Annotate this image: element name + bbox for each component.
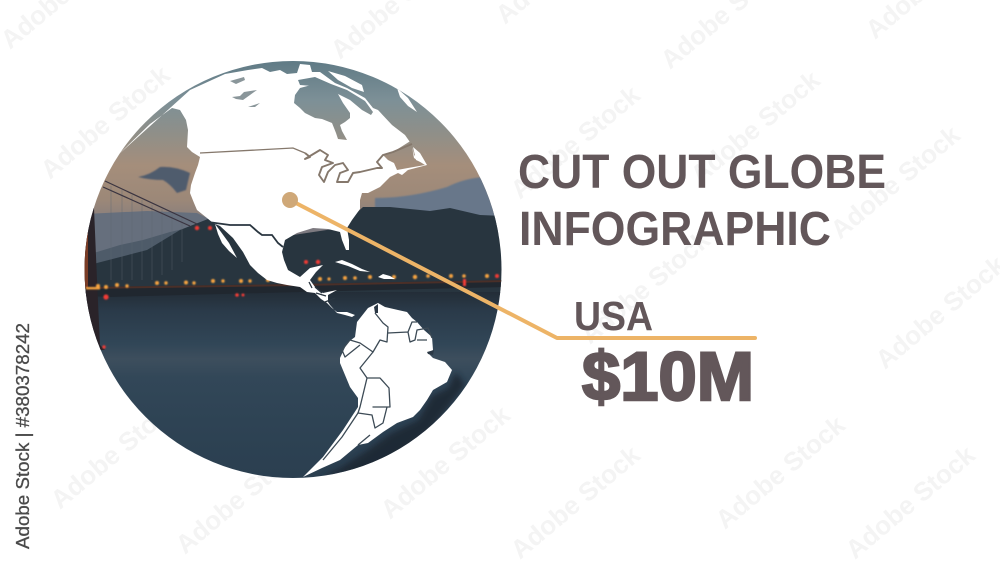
sea xyxy=(80,292,510,487)
Amazon mouth xyxy=(427,350,434,355)
bridge tower xyxy=(84,208,105,350)
bridge suspenders xyxy=(111,186,182,280)
bridge cables xyxy=(103,181,197,226)
bridge deck xyxy=(85,280,505,297)
label: USA: USA xyxy=(574,293,653,339)
globe xyxy=(80,55,510,487)
cloud: right bank xyxy=(375,177,505,225)
marker dot xyxy=(282,192,298,208)
title: INFOGRAPHIC xyxy=(519,203,831,256)
watermark: Adobe Stock xyxy=(35,59,176,185)
stock credit: Adobe Stock | #380378242 xyxy=(13,323,33,549)
South America borders xyxy=(323,313,432,460)
value: $10M: $10M xyxy=(582,338,754,415)
watermark: Adobe Stock xyxy=(840,439,981,563)
watermark: Adobe Stock xyxy=(575,224,716,350)
watermark: Adobe Stock xyxy=(685,64,826,190)
watermark: Adobe Stock xyxy=(505,439,646,563)
Atlantic Canada cut-out xyxy=(383,140,425,170)
Lake Maracaibo xyxy=(374,304,378,313)
border: USA and Canada 49th parallel xyxy=(200,148,305,153)
globe photo: sky xyxy=(80,55,510,235)
line: USA to label xyxy=(290,200,755,338)
shadow under South America xyxy=(320,372,465,477)
cloud: small left xyxy=(138,167,190,193)
land: South America xyxy=(303,303,452,477)
watermark: Adobe Stock xyxy=(375,399,516,525)
watermark: Adobe Stock xyxy=(45,389,186,515)
border: Central America xyxy=(308,282,328,302)
title: CUT OUT GLOBE xyxy=(518,146,886,199)
Hudson Bay xyxy=(294,84,350,140)
dark hills xyxy=(85,207,505,295)
Cuba xyxy=(335,260,370,272)
border: Canada and USA with Great Lakes xyxy=(305,144,412,182)
title xyxy=(518,146,886,256)
city lights xyxy=(86,274,489,289)
white bits: Nova Scotia xyxy=(396,147,427,175)
mid hill left xyxy=(96,230,181,263)
land: North America xyxy=(118,64,427,317)
leader line xyxy=(282,192,755,338)
far hills left xyxy=(85,211,208,254)
watermark: Adobe Stock xyxy=(825,119,966,245)
watermark: Adobe Stock xyxy=(170,434,311,560)
watermark: Adobe Stock xyxy=(710,409,851,535)
Arctic islands xyxy=(328,71,417,112)
watermark: Adobe Stock xyxy=(505,79,646,205)
Arctic channel xyxy=(298,77,373,115)
arctic lakes xyxy=(230,77,260,107)
Hispaniola xyxy=(378,274,395,279)
Baja California xyxy=(215,224,237,258)
border: USA and Mexico xyxy=(208,222,283,247)
red lights xyxy=(102,226,499,349)
